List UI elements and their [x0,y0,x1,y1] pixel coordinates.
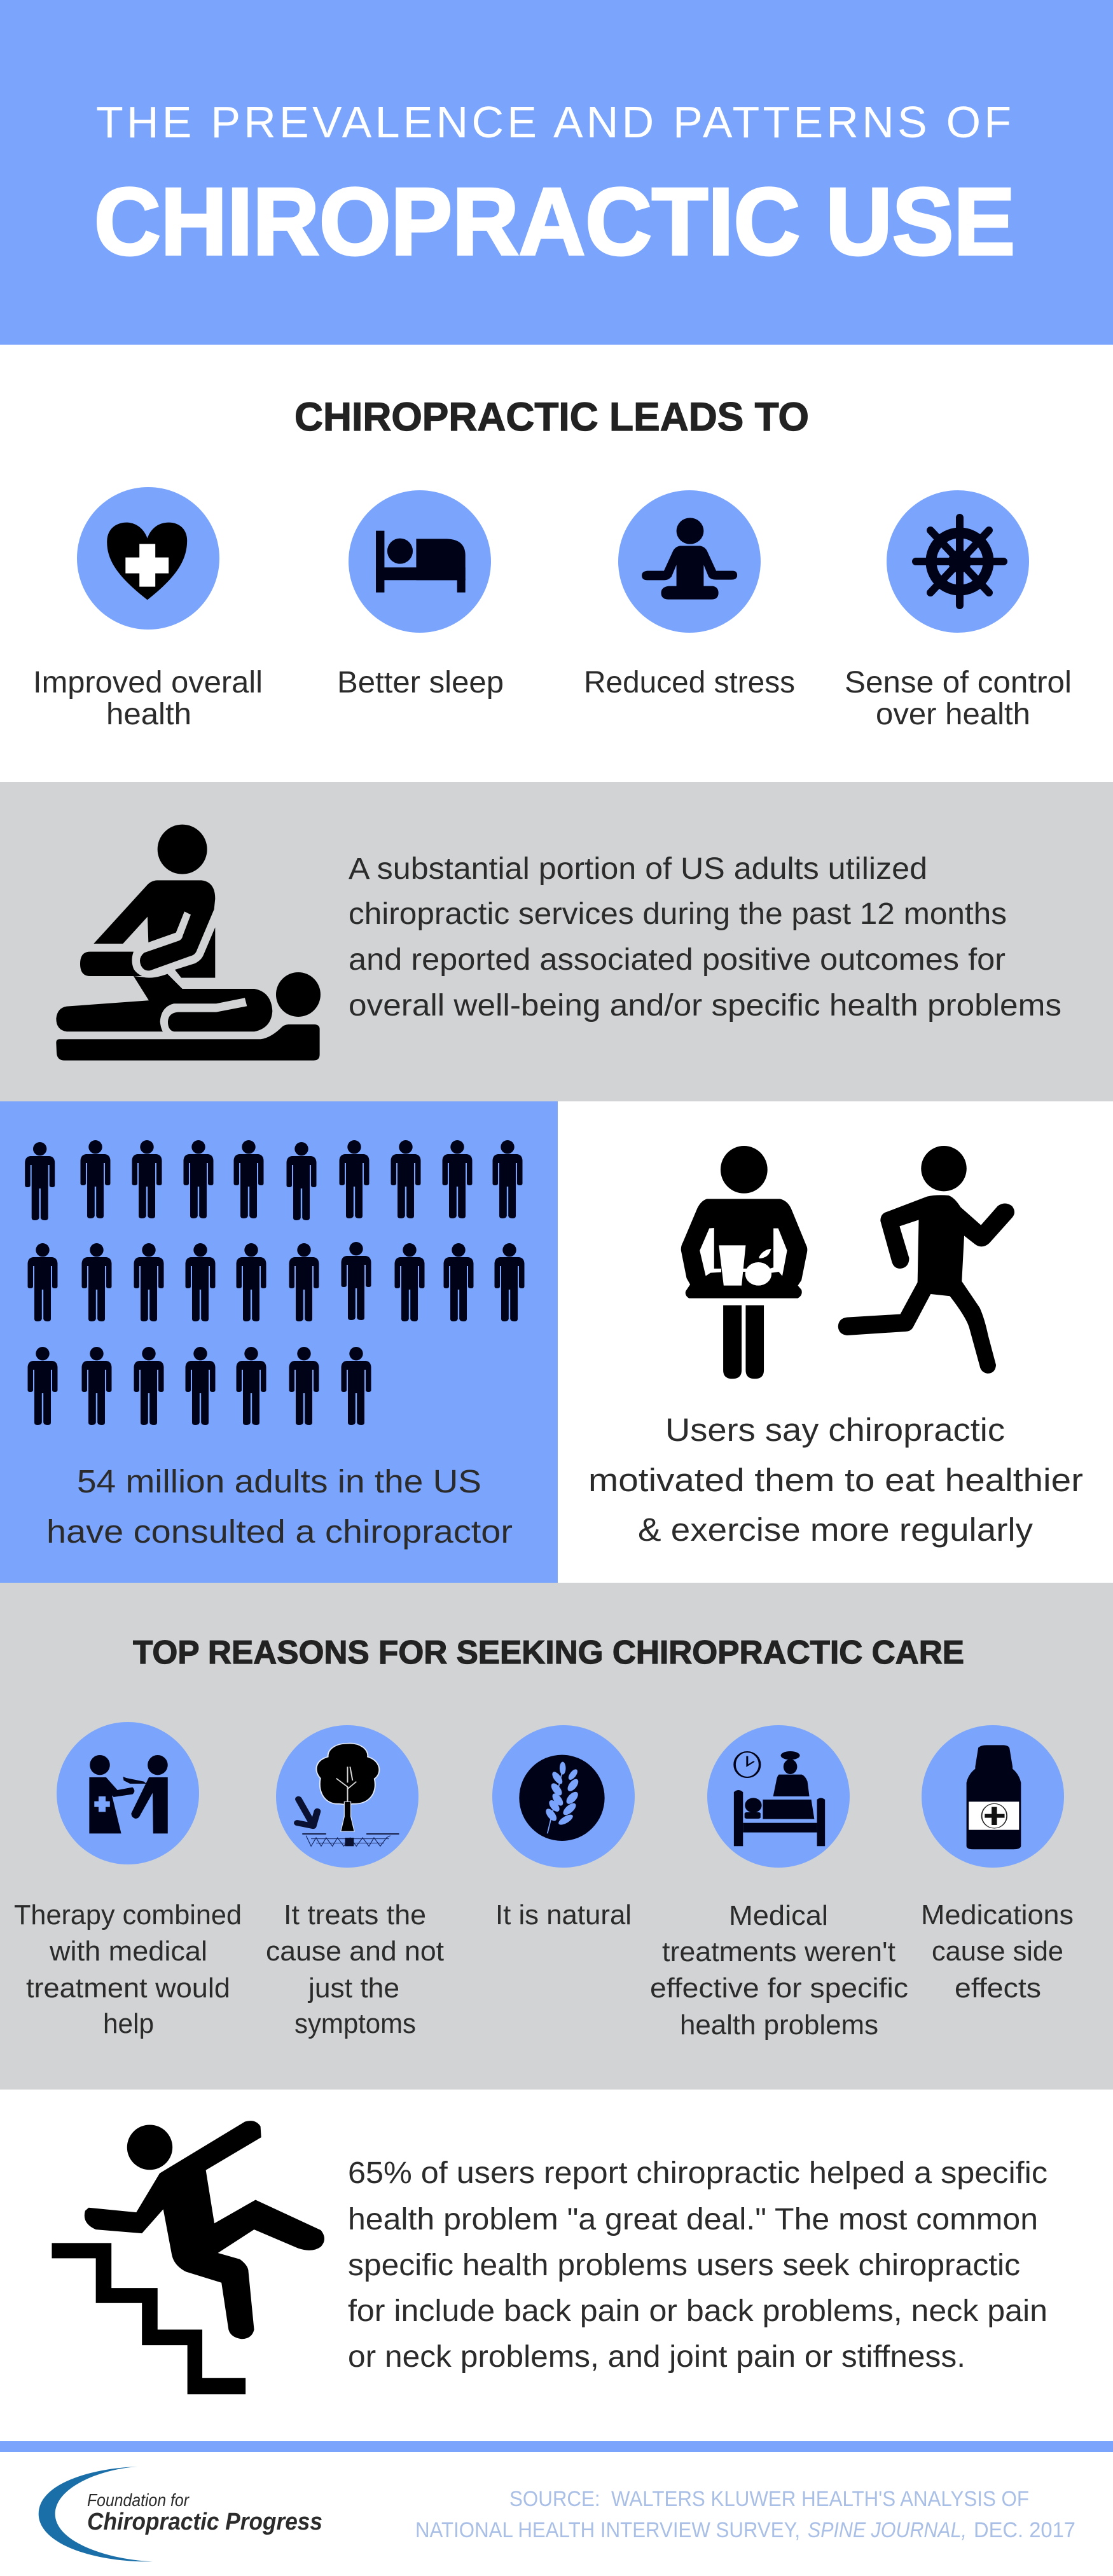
label: medical treatments: treatments weren't [662,1936,895,1967]
label: treats the cause: symptoms [294,2008,416,2039]
label: medical treatments [650,1900,908,2041]
logo: Foundation for Chiropractic Progress [39,2467,322,2561]
icon: person holding tray of food [681,1146,807,1379]
text block: 65 percent of users: for include back pain or back problems, neck pain [348,2294,1047,2328]
label: treats the cause: cause and not [266,1936,444,1967]
text: users say chiropractic motivated them [588,1412,1083,1548]
logo: Foundation for Chiropractic Progress: Chiropractic Progress [87,2509,322,2535]
text block: substantial portion: overall well-being and/or specific health problems [349,989,1061,1023]
label: sense of control over health: over health [876,698,1030,731]
panel: 54 million adults [0,1101,558,1583]
text block: 65 percent of users: specific health problems users seek chiropractic [348,2249,1020,2282]
text: users say chiropractic motivated them: motivated them to eat healthier [588,1462,1083,1498]
text: users say chiropractic motivated them: & exercise more regularly [638,1512,1034,1548]
icon: ship wheel [887,490,1029,633]
source note: SPINE JOURNAL, [808,2518,967,2542]
panel: footer [39,2467,1075,2561]
icon: wheat sprig [492,1725,635,1868]
label: medications side effects: cause side [932,1936,1063,1967]
icon: person falling on stairs [52,2121,324,2394]
label: medical treatments: effective for specific [650,1973,908,2004]
label: medical treatments: health problems [680,2009,878,2041]
label: treats the cause: just the [307,1973,399,2004]
text block: 65 percent of users: or neck problems, and joint pain or stiffness. [348,2340,965,2374]
icon: doctor and patient [57,1722,199,1864]
text: users say chiropractic motivated them: Users say chiropractic [665,1412,1005,1448]
icon: hospital bed with nurse [707,1725,850,1868]
heading: CHIROPRACTIC LEADS TO [294,395,809,439]
text block: substantial portion: A substantial portion of US adults utilized [349,852,927,886]
label: medications side effects: Medications [921,1899,1074,1931]
source note: NATIONAL HEALTH INTERVIEW SURVEY, [415,2518,800,2542]
label: treats the cause: It treats the [284,1899,426,1931]
panel: chiropractic leads to [33,395,1072,731]
panel: substantial portion [0,782,1113,1101]
text: 54 million adults: have consulted a chiropractor [46,1513,513,1550]
icon: meditating person [618,490,761,633]
source note: DEC. 2017 [974,2518,1075,2542]
logo: Foundation for Chiropractic Progress: Foundation for [87,2490,190,2510]
label: sense of control over health [845,666,1072,731]
text block: 65 percent of users [348,2156,1047,2374]
text block: substantial portion: chiropractic services during the past 12 months [349,897,1007,931]
label: improved overall health [33,666,263,731]
label: therapy combined [14,1899,242,2039]
label: medications side effects [921,1899,1074,2004]
text block: substantial portion: and reported associated positive outcomes for [349,943,1006,977]
label: therapy combined: Therapy combined [14,1899,242,1931]
source note: SOURCE: WALTERS KLUWER HEALTH'S ANALYSIS OF [509,2487,1029,2511]
text block: 65 percent of users: health problem "a great deal." The most common [348,2203,1038,2236]
icon: bed [349,490,491,633]
panel: eat healthier and exercise [588,1146,1083,1548]
text block: substantial portion [349,852,1061,1023]
icon: medicine bottle [922,1725,1064,1868]
text block: 65 percent of users: 65% of users report chiropractic helped a specific [348,2156,1047,2190]
label: sense of control over health: Sense of control [845,666,1072,699]
label: therapy combined: help [103,2008,154,2039]
heading: TOP REASONS FOR SEEKING CHIROPRACTIC CARE [133,1634,964,1671]
label: improved overall health: health [106,698,191,731]
panel: specific health problems [52,2121,1047,2394]
icon: runner [838,1146,1014,1374]
icon: therapist treating patient [56,825,321,1061]
icon: tree with roots and arrow [276,1725,418,1868]
source note [415,2487,1075,2542]
label: medications side effects: effects [955,1973,1041,2004]
label: therapy combined: treatment would [26,1973,230,2004]
subtitle: THE PREVALENCE AND PATTERNS OF [96,97,1011,147]
panel: header [0,0,1113,345]
pictogram: people grid [25,1140,524,1425]
label: treats the cause [266,1899,444,2039]
label: improved overall health: Improved overall [33,666,263,699]
text: 54 million adults: 54 million adults in the US [77,1463,481,1499]
icon: heart with cross [77,487,219,630]
label: it is natural: It is natural [495,1899,632,1931]
label: therapy combined: with medical [49,1936,207,1967]
text: 54 million adults [46,1463,513,1550]
label: reduced stress: Reduced stress [584,666,795,699]
title: CHIROPRACTIC USE [94,168,1015,275]
label: medical treatments: Medical [729,1900,828,1931]
label: better sleep: Better sleep [337,666,504,699]
panel: top reasons [0,1583,1113,2090]
